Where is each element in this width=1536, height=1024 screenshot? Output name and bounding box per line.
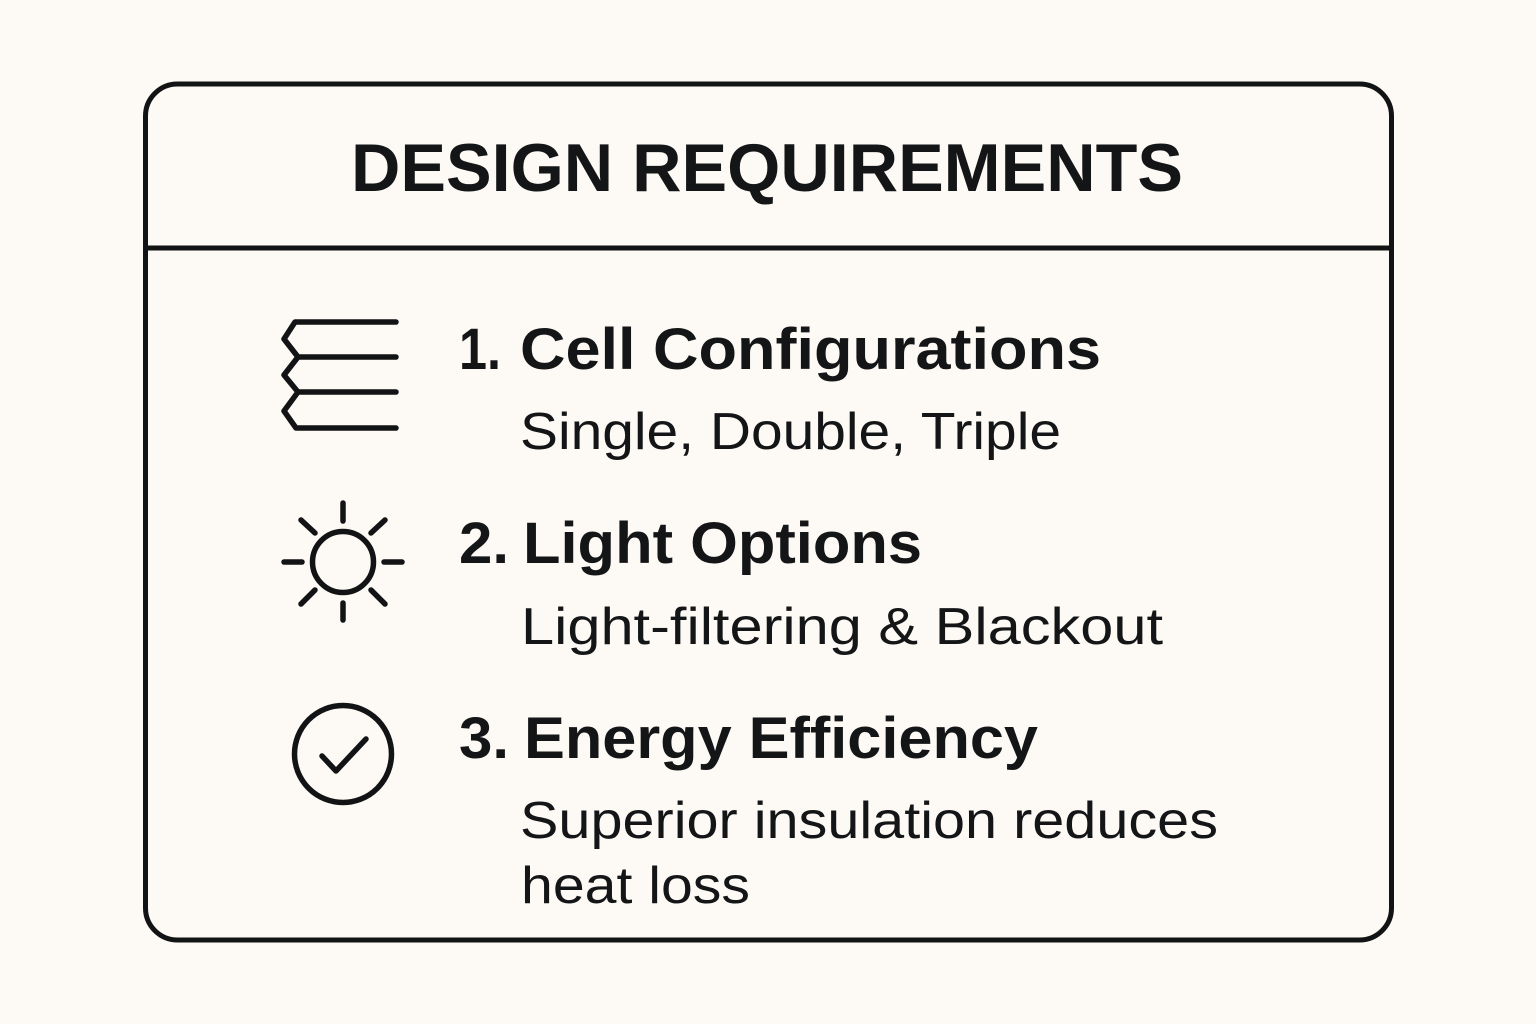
text: insulation benefit: heat loss — [521, 857, 750, 915]
icon: stacked cellular layers — [284, 322, 396, 428]
heading: cell configurations: Cell Configurations — [520, 317, 1101, 382]
text: light choices: Light-filtering & Blackout — [521, 598, 1164, 656]
heading: light options: Light Options — [523, 511, 922, 576]
text: cell options: Single, Double, Triple — [520, 403, 1061, 461]
title: DESIGN REQUIREMENTS — [351, 130, 1183, 206]
item 1: cell configurations — [284, 317, 1101, 461]
heading: energy efficiency: Energy Efficiency — [524, 706, 1038, 771]
heading: energy efficiency: 3. — [459, 706, 509, 771]
panel: design requirements card — [146, 84, 1392, 940]
text: insulation benefit: Superior insulation reduces — [520, 792, 1218, 850]
icon: sun — [284, 503, 402, 620]
icon: check circle — [294, 706, 392, 802]
item 3: energy efficiency — [294, 706, 1218, 915]
heading: cell configurations: 1. — [459, 317, 501, 382]
item 2: light options — [284, 503, 1164, 656]
text: insulation benefit — [520, 792, 1218, 915]
heading: light options: 2. — [459, 511, 509, 576]
